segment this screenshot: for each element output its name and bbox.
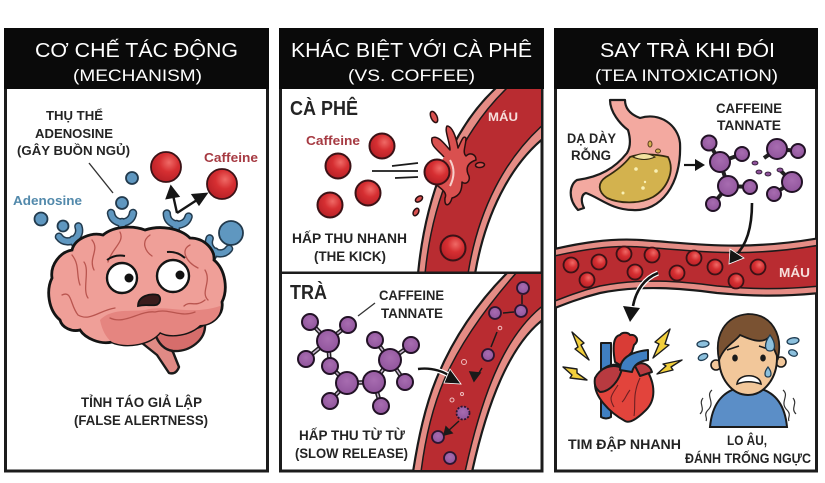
label: empty stomach: RỖNG xyxy=(571,148,611,163)
label: caffeine tannate xyxy=(716,101,782,133)
caption: anxiety palpitations: LO ÂU, xyxy=(727,433,767,448)
panel: versus coffee xyxy=(279,28,545,472)
icon: adenosine molecules xyxy=(34,172,243,245)
label: empty stomach xyxy=(567,131,616,163)
leader line: receptor xyxy=(89,163,113,193)
header: versus coffee: KHÁC BIỆT VỚI CÀ PHÊ xyxy=(291,39,532,62)
blood vessel: tea xyxy=(413,272,545,472)
label: adenosine receptor: THỤ THỂ xyxy=(46,108,103,123)
arrow: molecule into blood xyxy=(729,203,752,264)
caption: slow release: HẤP THU TỪ TỪ xyxy=(299,428,406,443)
icon: impact crescent xyxy=(450,160,454,186)
arrow: stomach to molecule xyxy=(684,159,705,171)
caption: false alertness: TỈNH TÁO GIẢ LẬP xyxy=(81,393,202,410)
panel: mechanism xyxy=(4,28,269,471)
icon: caffeine in blood xyxy=(440,236,466,260)
icon: caffeine molecules coffee xyxy=(318,134,450,218)
label: caffeine tannate: CAFFEINE xyxy=(716,101,782,116)
icon: shaking lines xyxy=(700,390,796,421)
caption: fast absorption xyxy=(292,231,407,264)
icon: tiny fragments xyxy=(450,326,502,402)
label: caffeine tannate: TANNATE xyxy=(381,306,443,321)
icon: stomach xyxy=(571,100,680,210)
blood vessel: coffee xyxy=(418,87,545,274)
speed lines xyxy=(372,163,418,178)
label: adenosine: Adenosine xyxy=(13,193,82,208)
leader line: tannate xyxy=(358,303,375,316)
label: coffee: CÀ PHÊ xyxy=(290,96,358,120)
arrows: caffeine displaced xyxy=(167,187,206,213)
header: tea intoxication xyxy=(554,28,818,89)
icon: eyes xyxy=(107,252,189,293)
label: adenosine receptor xyxy=(17,108,130,158)
label: blood: MÁU xyxy=(488,109,518,124)
header: mechanism: (MECHANISM) xyxy=(73,66,202,85)
caption: fast absorption: (THE KICK) xyxy=(314,249,386,264)
label: adenosine receptor: (GÂY BUỒN NGỦ) xyxy=(17,143,130,158)
label: blood: MÁU xyxy=(779,265,810,280)
panel: tea intoxication xyxy=(550,28,820,471)
label: tea: TRÀ xyxy=(290,281,327,304)
icon: lightning bolts xyxy=(563,329,682,380)
header: tea intoxication: (TEA INTOXICATION) xyxy=(595,66,778,85)
label: caffeine tannate: CAFFEINE xyxy=(379,288,444,303)
header: mechanism xyxy=(4,28,269,89)
header: mechanism: CƠ CHẾ TÁC ĐỘNG xyxy=(35,39,238,62)
icon: released molecules xyxy=(432,282,529,464)
icon: anxious person xyxy=(697,314,799,427)
icon: caffeine molecules xyxy=(151,152,237,199)
header: versus coffee xyxy=(279,28,544,89)
label: caffeine: Caffeine xyxy=(204,150,258,165)
arrow: blood to heart xyxy=(623,273,658,322)
label: caffeine: Caffeine xyxy=(306,134,360,148)
icon: heart xyxy=(595,333,653,422)
blood vessel: horizontal xyxy=(550,238,820,310)
icon: mouth xyxy=(138,294,160,306)
label: empty stomach: DẠ DÀY xyxy=(567,131,616,146)
caption: false alertness xyxy=(74,393,208,428)
caption: slow release xyxy=(295,428,408,461)
icon: sweat drops xyxy=(697,335,799,377)
caption: anxiety palpitations: ĐÁNH TRỐNG NGỰC xyxy=(685,451,811,466)
icon: splash xyxy=(412,110,485,217)
caption: rapid heartbeat: TIM ĐẬP NHANH xyxy=(568,437,681,452)
icon: receptors xyxy=(59,213,229,267)
icon: caffeine in bloodstream xyxy=(564,246,766,288)
label: caffeine tannate: TANNATE xyxy=(717,118,781,133)
header: versus coffee: (VS. COFFEE) xyxy=(348,66,475,85)
label: caffeine tannate xyxy=(379,288,444,321)
arrows: slow release xyxy=(444,295,522,435)
header: tea intoxication: SAY TRÀ KHI ĐÓI xyxy=(600,39,775,62)
label: adenosine receptor: ADENOSINE xyxy=(35,126,113,141)
caption: fast absorption: HẤP THU NHANH xyxy=(292,231,407,246)
arrow: into bloodstream xyxy=(418,369,461,384)
icon: tannate molecule xyxy=(298,314,419,414)
caption: false alertness: (FALSE ALERTNESS) xyxy=(74,412,208,428)
caption: anxiety palpitations xyxy=(685,433,811,466)
caption: slow release: (SLOW RELEASE) xyxy=(295,446,408,461)
icon: brain character xyxy=(49,227,225,373)
icon: breaking molecule xyxy=(702,136,805,211)
